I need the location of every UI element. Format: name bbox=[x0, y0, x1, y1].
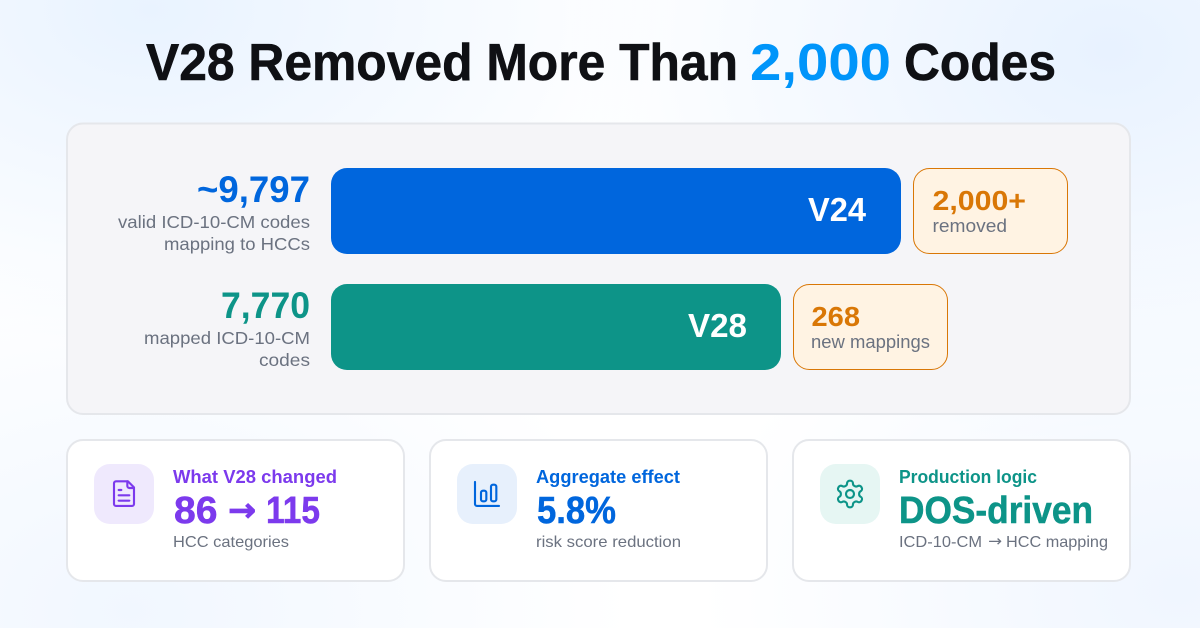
title bbox=[146, 34, 1056, 92]
V24 count label: mapping to HCCs bbox=[164, 234, 310, 254]
panel: production logic bbox=[793, 440, 1130, 581]
card text: HCC categories: What V28 changed bbox=[173, 466, 337, 487]
title: V28 Removed More Than bbox=[146, 34, 738, 92]
card text: DOS-driven bbox=[899, 466, 1108, 551]
callout: 2,000+ removed bbox=[914, 168, 1068, 254]
card text: risk score reduction bbox=[536, 466, 681, 551]
icon: document bbox=[94, 464, 154, 524]
V28 count label: 7,770 bbox=[221, 285, 310, 326]
card text: risk score reduction: risk score reduction bbox=[536, 534, 681, 551]
V28 bar bbox=[331, 284, 781, 370]
callout: 268 new mappings bbox=[794, 284, 948, 370]
title: 2,000 bbox=[750, 34, 891, 92]
panel: code count comparison bbox=[67, 124, 1130, 414]
V24 bar: V24 bbox=[808, 191, 867, 228]
V28 bar: V28 bbox=[688, 307, 747, 344]
V24 count label: ~9,797 bbox=[197, 169, 310, 210]
V24 bar bbox=[331, 168, 901, 254]
card text: risk score reduction: Aggregate effect bbox=[536, 466, 680, 487]
card text: HCC categories: 115 bbox=[266, 490, 320, 532]
callout: 268 new mappings: new mappings bbox=[811, 332, 930, 352]
callout: 2,000+ removed: 2,000+ bbox=[932, 185, 1026, 216]
card text: HCC categories bbox=[173, 466, 337, 551]
card text: HCC categories: → bbox=[228, 491, 256, 529]
V28 row bbox=[144, 284, 948, 370]
callout: 268 new mappings: 268 bbox=[812, 301, 860, 332]
card text: DOS-driven: ICD-10-CM bbox=[899, 534, 982, 551]
card text: DOS-driven: DOS-driven bbox=[899, 490, 1093, 532]
panel: what V28 changed bbox=[67, 440, 404, 581]
callout: 2,000+ removed: removed bbox=[932, 216, 1007, 236]
title: Codes bbox=[904, 34, 1056, 92]
card text: DOS-driven: Production logic bbox=[899, 466, 1037, 487]
card text: risk score reduction: 5.8% bbox=[537, 490, 616, 532]
card text: DOS-driven: HCC mapping bbox=[1006, 534, 1108, 551]
icon: gear bbox=[820, 464, 880, 524]
V28 count label: mapped ICD-10-CM bbox=[144, 328, 310, 348]
icon: bar chart bbox=[457, 464, 517, 524]
card text: DOS-driven: → bbox=[988, 532, 1002, 550]
panel: aggregate effect bbox=[430, 440, 767, 581]
V24 row bbox=[118, 168, 1068, 254]
V28 count label bbox=[144, 285, 310, 370]
card text: HCC categories: HCC categories bbox=[173, 534, 289, 551]
V24 count label: valid ICD-10-CM codes bbox=[118, 212, 310, 232]
V24 count label bbox=[118, 169, 310, 254]
card text: HCC categories: 86 bbox=[174, 490, 218, 532]
V28 count label: codes bbox=[259, 350, 310, 370]
